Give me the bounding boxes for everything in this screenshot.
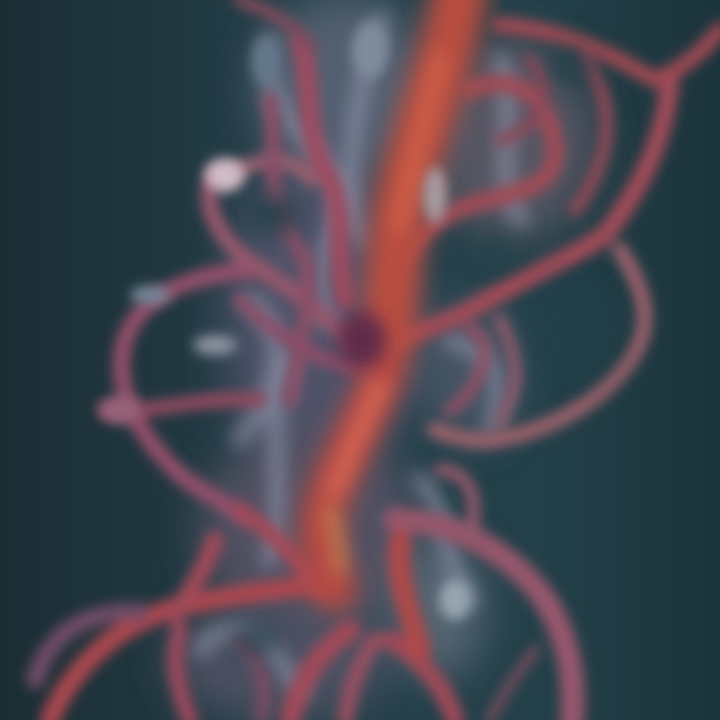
left horizontal branch bbox=[105, 399, 260, 411]
upper vessel bbox=[300, 40, 345, 300]
bottom vessels bbox=[390, 640, 455, 720]
lower right arc bbox=[395, 520, 573, 720]
right upper loop bbox=[385, 80, 670, 345]
gaps: dark openings between vessels bbox=[231, 52, 617, 654]
haze: muted tissue behind vessels bbox=[170, 0, 595, 720]
thin vessels: blue-grey bbox=[200, 20, 520, 690]
main artery trunk bbox=[321, 0, 460, 590]
right loop bbox=[435, 250, 644, 440]
dark crossing at vessel centre bbox=[338, 312, 386, 368]
lower left arc bbox=[50, 585, 320, 720]
upper left curl bbox=[209, 175, 350, 340]
highlights: pale glints bbox=[100, 22, 471, 620]
left loop bbox=[121, 270, 250, 520]
artery highlights bbox=[330, 60, 440, 570]
